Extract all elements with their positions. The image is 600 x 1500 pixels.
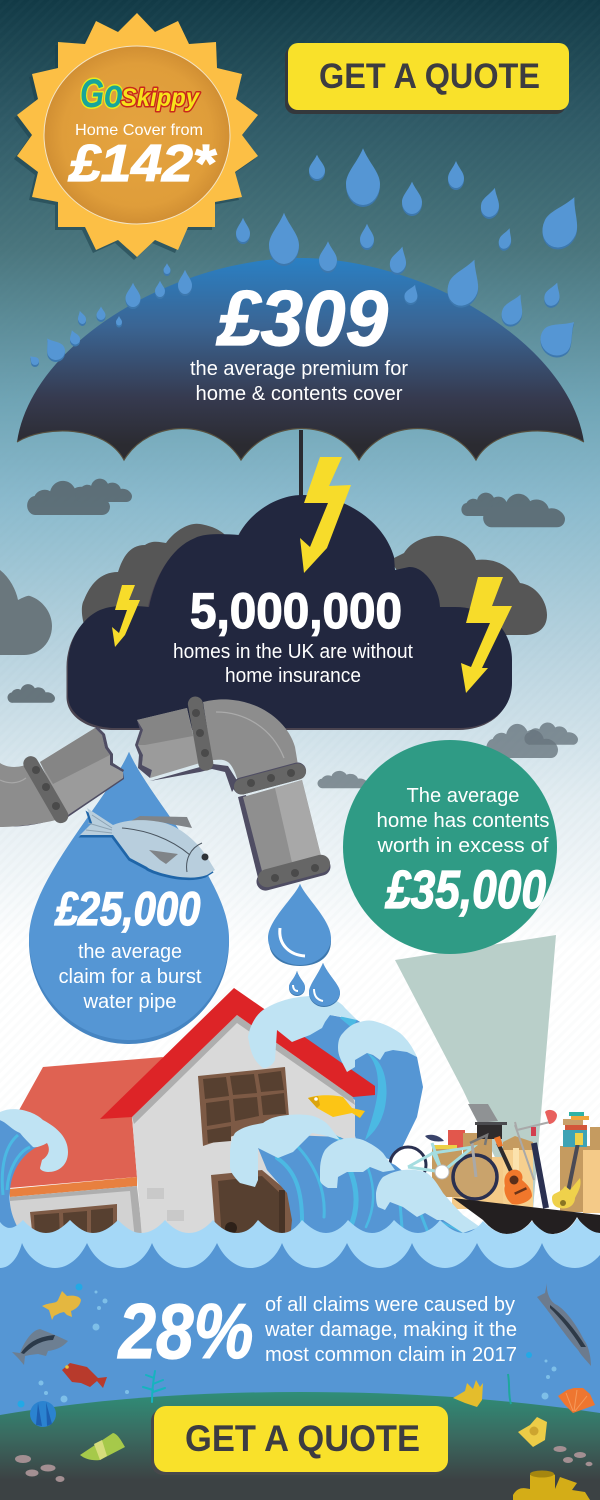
right broken pipe bbox=[135, 695, 333, 893]
contents value circle: £35,000 bbox=[384, 860, 546, 920]
bottom button: GET A QUOTE bbox=[185, 1418, 420, 1459]
contents value circle: The average bbox=[406, 785, 520, 807]
front waves bbox=[0, 996, 480, 1240]
GoSkippy logo: Go bbox=[80, 72, 123, 116]
badge price: £142* bbox=[67, 135, 217, 193]
bottom statistic: of all claims were caused by bbox=[265, 1294, 515, 1316]
bubbles bbox=[18, 1284, 556, 1408]
GoSkippy logo: Skippy bbox=[121, 84, 200, 112]
starburst badge bbox=[14, 13, 258, 260]
premium figure: £309 bbox=[216, 274, 389, 362]
uninsured homes figure: homes in the UK are without bbox=[173, 641, 413, 663]
premium figure: the average premium for bbox=[190, 358, 408, 380]
falling water drops bbox=[268, 884, 340, 1007]
seabed bbox=[0, 1392, 600, 1500]
GoSkippy logo bbox=[80, 72, 200, 116]
badge price: Home Cover from bbox=[75, 122, 203, 139]
raindrops bbox=[27, 148, 590, 367]
fish on drop bbox=[78, 808, 215, 880]
boat hull bbox=[453, 1198, 600, 1234]
premium figure bbox=[190, 274, 408, 405]
big water drop: claim for a burst bbox=[58, 966, 202, 988]
left grey storm cloud bbox=[0, 570, 52, 655]
bottom button bbox=[151, 1406, 448, 1475]
uninsured homes figure bbox=[173, 583, 413, 687]
bottom statistic: 28% bbox=[117, 1287, 254, 1375]
bottom statistic: most common claim in 2017 bbox=[265, 1344, 517, 1366]
lightning bolts bbox=[112, 457, 512, 693]
household contents on boat bbox=[390, 1104, 600, 1213]
uninsured homes figure: home insurance bbox=[225, 665, 361, 687]
left broken pipe bbox=[0, 727, 124, 827]
big water drop bbox=[29, 752, 229, 1044]
flooded house with back wave bbox=[9, 988, 423, 1240]
top button bbox=[285, 43, 569, 114]
small clouds bbox=[8, 479, 578, 788]
contents value circle: worth in excess of bbox=[376, 835, 549, 857]
umbrella bbox=[17, 258, 584, 510]
top button: GET A QUOTE bbox=[319, 57, 540, 96]
flood water bbox=[0, 1218, 600, 1500]
bottom statistic bbox=[117, 1287, 517, 1375]
big water drop: water pipe bbox=[82, 991, 176, 1013]
sea creatures and shells bbox=[12, 1283, 595, 1500]
contents value circle bbox=[343, 740, 557, 954]
big water drop: the average bbox=[78, 941, 182, 963]
bottom statistic: water damage, making it the bbox=[264, 1319, 517, 1341]
contents value circle: home has contents bbox=[376, 810, 550, 832]
main dark cloud bbox=[66, 495, 512, 730]
light beam bbox=[395, 935, 556, 1210]
premium figure: home & contents cover bbox=[196, 383, 403, 405]
grey clouds behind main cloud bbox=[82, 524, 547, 650]
big water drop: £25,000 bbox=[54, 882, 200, 935]
uninsured homes figure: 5,000,000 bbox=[190, 583, 402, 639]
